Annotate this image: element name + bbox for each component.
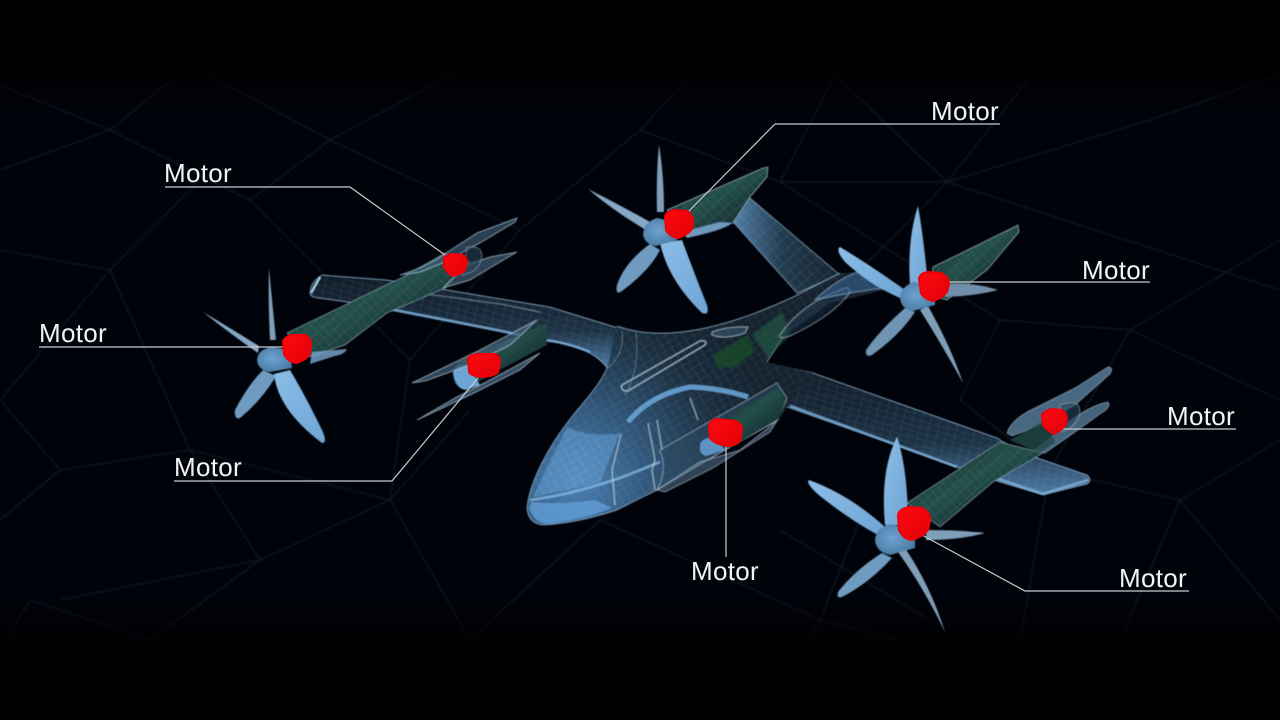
motor: right rear: [1042, 409, 1067, 434]
nose rim: [530, 462, 660, 500]
cabin top highlight: [628, 387, 748, 422]
right wing: [767, 363, 1090, 495]
label: right rear motor: Motor: [1167, 401, 1235, 431]
rear nacelle oval: [780, 288, 850, 338]
door frames: [612, 398, 698, 505]
label: rear left motor: Motor: [164, 158, 232, 188]
fuselage: [527, 271, 885, 525]
motor: top right: [919, 272, 949, 301]
upper hatch: [622, 341, 706, 391]
wing root flow lines: [607, 330, 637, 395]
label: right front motor: [922, 535, 1189, 593]
propeller: bottom right: [808, 437, 985, 632]
right front nacelle: [907, 442, 1043, 527]
rear outer fins: [400, 218, 517, 275]
motor: top left: [665, 210, 693, 238]
motor: left inner: [468, 354, 500, 377]
top left nacelle: [667, 167, 768, 238]
label: top left motor: [688, 96, 1000, 212]
aircraft: [203, 145, 1112, 632]
windscreen: [533, 427, 620, 497]
motor: centre: [709, 419, 742, 446]
motor: left front: [283, 335, 311, 363]
green structural section: [713, 335, 755, 368]
motor: right front: [898, 507, 930, 540]
centre nacelle: [657, 383, 787, 492]
label: centre motor: Motor: [691, 556, 759, 586]
propeller: top right: [838, 206, 998, 383]
label: left front motor: Motor: [39, 318, 107, 348]
left inner nacelle: [412, 320, 547, 420]
left front nacelle: [287, 218, 517, 364]
red motors: [283, 210, 1067, 540]
label: top left motor: Motor: [931, 96, 999, 126]
left wing: [310, 275, 625, 368]
label: rear left motor: [164, 158, 445, 255]
label: top right motor: Motor: [1082, 255, 1150, 285]
propeller: top left: [588, 145, 708, 314]
propeller: left front: [203, 268, 325, 443]
label: left inner motor: Motor: [174, 452, 242, 482]
motor: rear left: [444, 254, 467, 276]
right rear nacelle fins: [1007, 367, 1112, 453]
label: left inner motor: [174, 378, 478, 482]
top right nacelle: [930, 225, 1019, 300]
tail boom and rear wing: [725, 198, 840, 293]
label: right front motor: Motor: [1119, 563, 1187, 593]
